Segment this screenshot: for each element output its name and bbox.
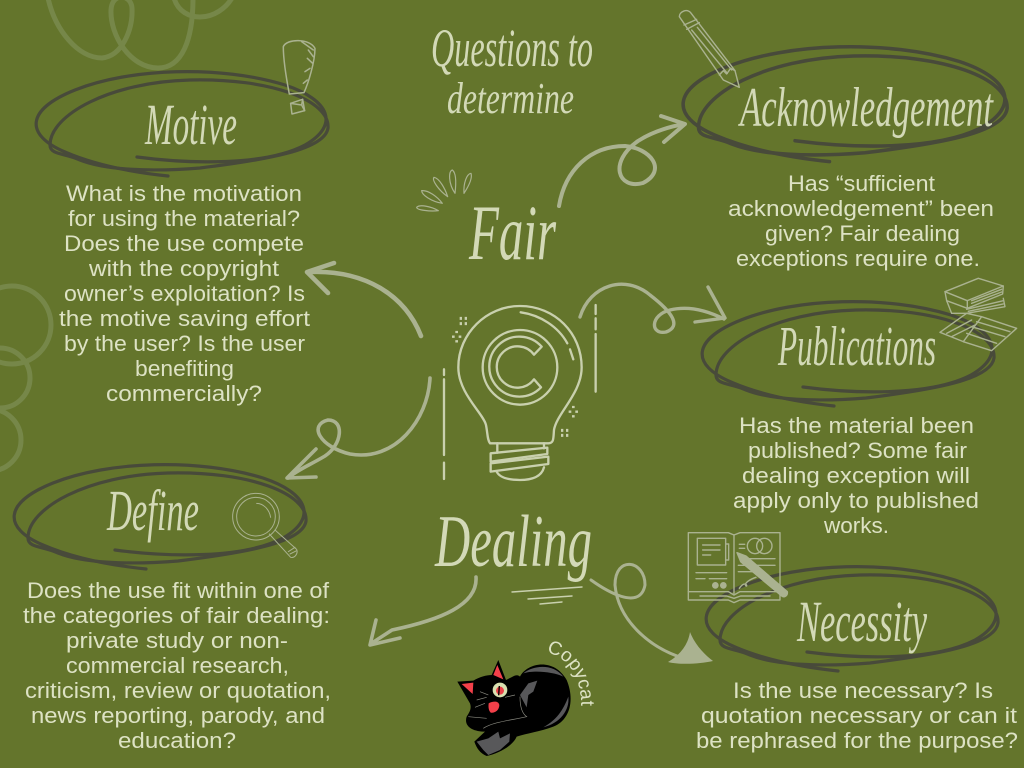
background scribbles top left <box>48 0 232 68</box>
text: publications description: Has the material been <box>739 413 974 438</box>
panel: define <box>14 465 331 753</box>
heading: Necessity: Necessity <box>796 589 927 654</box>
text: define description: news reporting, parody, and <box>31 703 325 728</box>
text: necessity description <box>696 678 1018 753</box>
text: motive description: by the user? Is the user <box>64 331 305 356</box>
text: define description: the categories of fair dealing: <box>23 603 330 628</box>
underline under Dealing <box>512 587 582 604</box>
scribbled ellipse: acknowledgement <box>683 47 1007 162</box>
text: motive description: for using the material? <box>68 206 300 231</box>
mascot: black cat <box>457 660 571 756</box>
text: necessity description: quotation necessary or can it <box>701 703 1017 728</box>
arrow: bulb to define <box>287 378 430 478</box>
text: define description: private study or non- <box>66 628 288 653</box>
scribbled ellipse: motive <box>36 72 328 176</box>
text: publications description: dealing exception will <box>742 463 970 488</box>
background scribbles left edge <box>0 286 51 471</box>
text: motive description: benefiting <box>135 356 234 381</box>
text: motive description: the motive saving effort <box>59 306 310 331</box>
text: motive description <box>59 181 310 406</box>
icon: copyright light bulb <box>444 305 596 480</box>
panel: publications <box>702 278 1017 538</box>
text: define description <box>23 578 331 753</box>
heading: Dealing: Dealing <box>434 501 592 583</box>
arrow: dealing to copycat area <box>370 577 476 645</box>
heading: Motive: Motive <box>144 92 237 157</box>
text: acknowledgement description <box>728 171 994 271</box>
text: acknowledgement description: given? Fair dealing <box>765 221 960 246</box>
arrow: bulb to motive <box>307 263 421 336</box>
arrow: dealing to necessity <box>591 564 713 664</box>
text: motive description: with the copyright <box>88 256 279 281</box>
text: define description: commercial research, <box>66 653 289 678</box>
scribbled ellipse: publications <box>702 302 994 406</box>
icon: magnifying glass <box>233 493 297 557</box>
text: acknowledgement description: Has “sufficient <box>788 171 935 196</box>
label: Copycat curved text: Copycat <box>549 642 594 706</box>
text: necessity description: be rephrased for the purpose? <box>696 728 1018 753</box>
text: motive description: Does the use compete <box>64 231 304 256</box>
text: acknowledgement description: exceptions require one. <box>736 246 980 271</box>
title: questions to determine <box>431 18 593 123</box>
text: motive description: commercially? <box>106 381 262 406</box>
text: define description: education? <box>118 728 236 753</box>
text: publications description: apply only to published <box>733 488 979 513</box>
text: motive description: What is the motivation <box>66 181 302 206</box>
icon: pencil <box>679 11 739 87</box>
text: define description: criticism, review or quotation, <box>25 678 331 703</box>
text: acknowledgement description: acknowledgement” been <box>728 196 994 221</box>
panel: necessity <box>688 533 1018 753</box>
icon: stack of books <box>940 278 1017 351</box>
icon: open book with pen <box>688 533 787 603</box>
arrow: fair to acknowledgement <box>559 116 685 206</box>
arrow: bulb to publications <box>580 284 725 332</box>
panel: motive <box>36 41 328 406</box>
text: define description: Does the use fit within one of <box>27 578 330 603</box>
heading: Define: Define <box>106 478 199 543</box>
icon: sunburst petals <box>417 170 471 211</box>
text: necessity description: Is the use necessary? Is <box>733 678 993 703</box>
scribbled ellipse: necessity <box>706 567 998 671</box>
text: motive description: owner’s exploitation? Is <box>64 281 305 306</box>
heading: Fair: Fair <box>468 189 556 276</box>
text: publications description: published? Some fair <box>748 438 967 463</box>
icon: exclamation mark <box>283 41 315 114</box>
panel: acknowledgement <box>679 11 1007 271</box>
title: questions to determine: determine <box>447 74 574 123</box>
title: questions to determine: Questions to <box>431 18 593 78</box>
scribbled ellipse: define <box>14 465 306 569</box>
text: publications description <box>733 413 979 538</box>
text: publications description: works. <box>823 513 889 538</box>
